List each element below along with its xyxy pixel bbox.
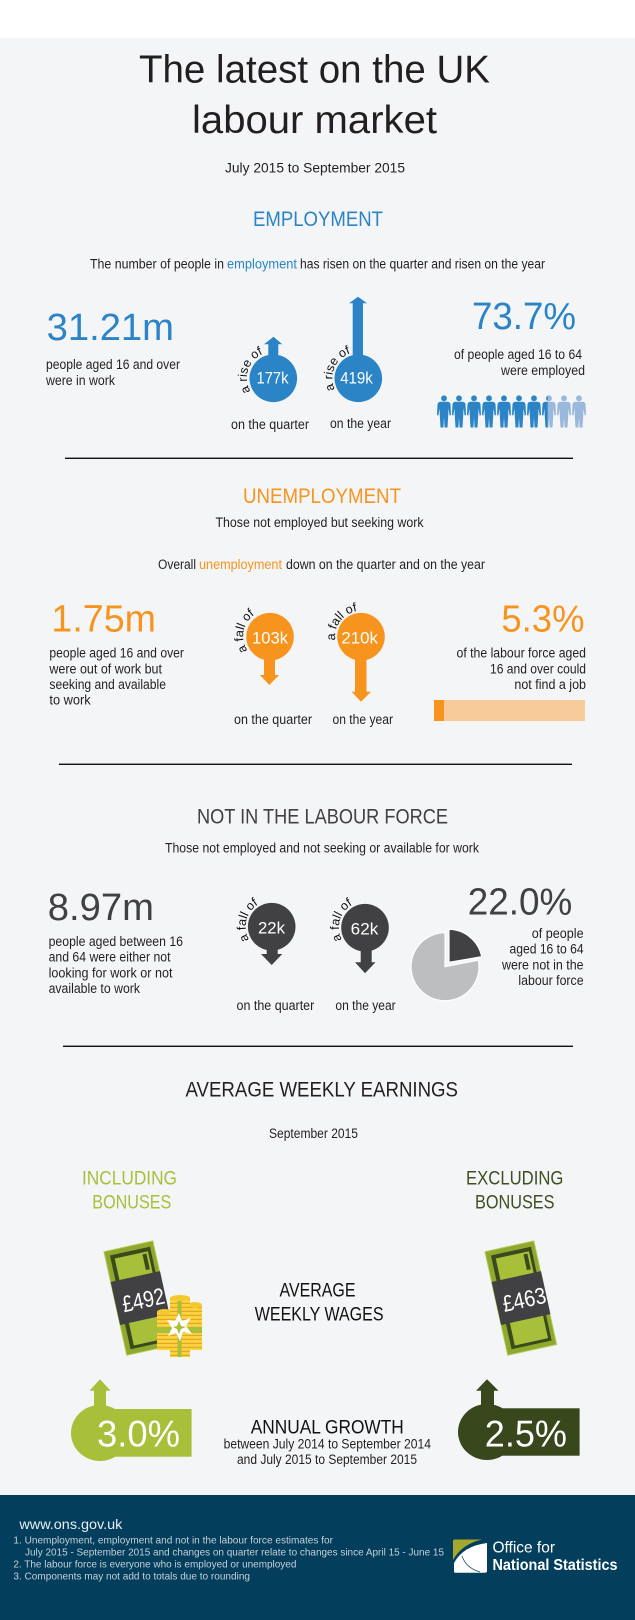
stat: people unemployed: people aged 16 and over bbox=[49, 646, 184, 661]
icon: fall on the quarter: 22k bbox=[258, 918, 285, 938]
icon: fall on the quarter bbox=[234, 608, 312, 727]
stat: people inactive: people aged between 16 bbox=[49, 934, 183, 949]
icon: fall on the year: on the year bbox=[332, 712, 393, 727]
stat: people unemployed: were out of work but bbox=[48, 661, 162, 676]
stat: unemployment rate: 16 and over could bbox=[490, 661, 586, 676]
icon: growth including bonuses: 3.0% bbox=[97, 1414, 180, 1455]
icon: rise on the quarter: on the quarter bbox=[231, 417, 309, 432]
heading: excluding bonuses: BONUSES bbox=[475, 1192, 554, 1213]
website: www.ons.gov.uk bbox=[18, 1516, 123, 1532]
pictogram: people employed bbox=[437, 395, 586, 428]
icon: banknote bundle £463 bbox=[485, 1241, 557, 1355]
title: The latest on the UK bbox=[139, 49, 490, 92]
label: annual growth bbox=[224, 1417, 431, 1467]
heading: including bonuses bbox=[82, 1168, 177, 1213]
stat: inactivity rate: aged 16 to 64 bbox=[510, 942, 584, 957]
stat: unemployment rate: not find a job bbox=[514, 677, 586, 692]
heading: employment: EMPLOYMENT bbox=[253, 208, 383, 231]
stat: people in work: were in work bbox=[45, 373, 115, 388]
title: labour market bbox=[192, 99, 437, 142]
panel: average weekly earnings bbox=[71, 1079, 580, 1467]
stat: employment rate: of people aged 16 to 64 bbox=[454, 347, 582, 362]
stat: inactivity rate: labour force bbox=[518, 973, 584, 988]
footnotes: July 2015 - September 2015 and changes on quarter relate to changes since April 15 - June 15 bbox=[25, 1547, 444, 1558]
panel: not in the labour force bbox=[48, 805, 584, 1013]
icon: banknote bundle £463: £463 bbox=[500, 1282, 548, 1317]
icon: gold coin stacks with bow bbox=[157, 1295, 202, 1357]
stat: people inactive: 8.97m bbox=[48, 887, 154, 929]
footer bbox=[0, 1495, 635, 1620]
label: annual growth: ANNUAL GROWTH bbox=[251, 1417, 404, 1438]
icon: banknote bundle £492 bbox=[104, 1241, 176, 1355]
icon: fall on the quarter: 103k bbox=[252, 628, 288, 647]
icon: fall on the quarter: on the quarter bbox=[236, 998, 315, 1013]
stat: people unemployed bbox=[48, 599, 184, 708]
footnotes bbox=[13, 1535, 444, 1582]
panel: employment bbox=[45, 208, 586, 432]
label: annual growth: between July 2014 to September 2014 bbox=[224, 1437, 431, 1452]
heading: excluding bonuses: EXCLUDING bbox=[466, 1168, 563, 1189]
stat: people in work bbox=[45, 307, 180, 388]
employment summary sentence bbox=[90, 256, 545, 271]
earnings date: September 2015 bbox=[269, 1126, 358, 1141]
icon: fall on the quarter bbox=[236, 896, 315, 1013]
icon: rise on the quarter: a rise of bbox=[238, 346, 262, 393]
logo: Office for National Statistics bbox=[453, 1540, 618, 1574]
logo: Office for National Statistics: National Statistics bbox=[492, 1557, 618, 1574]
stat: employment rate: were employed bbox=[500, 363, 585, 378]
bar: unemployment share bbox=[434, 700, 585, 721]
icon: fall on the year: on the year bbox=[335, 998, 396, 1013]
stat: inactivity rate: 22.0% bbox=[468, 881, 572, 923]
icon: fall on the year: a fall of bbox=[330, 897, 352, 941]
subtitle: date range: July 2015 to September 2015 bbox=[225, 161, 405, 176]
label: average weekly wages: AVERAGE bbox=[280, 1281, 356, 1302]
icon: rise on the quarter: 177k bbox=[256, 368, 289, 387]
employment summary sentence: employment bbox=[227, 256, 297, 271]
icon: rise on the year bbox=[324, 296, 391, 431]
logo: Office for National Statistics: Office for bbox=[492, 1540, 556, 1557]
unemployment summary sentence: unemployment bbox=[199, 557, 282, 572]
stat: people in work: 31.21m bbox=[47, 307, 174, 349]
icon: fall on the year: 62k bbox=[351, 920, 379, 938]
icon: rise on the year: 419k bbox=[340, 368, 373, 387]
icon: rise on the quarter bbox=[231, 336, 309, 432]
footnotes: 3. Components may not add to totals due to rounding bbox=[13, 1571, 250, 1582]
icon: banknote bundle £492: £492 bbox=[119, 1283, 167, 1317]
employment summary sentence: has risen on the quarter and risen on the year bbox=[300, 256, 545, 271]
icon: growth excluding bonuses bbox=[458, 1379, 580, 1460]
stat: unemployment rate: of the labour force aged bbox=[456, 646, 586, 661]
stat: people unemployed: 1.75m bbox=[51, 599, 156, 641]
stat: unemployment rate bbox=[456, 599, 586, 692]
heading: not in the labour force: NOT IN THE LABOUR FORCE bbox=[197, 805, 448, 828]
stat: inactivity rate bbox=[468, 881, 584, 988]
stat: people inactive: available to work bbox=[49, 981, 140, 996]
stat: unemployment rate: 5.3% bbox=[501, 599, 584, 641]
stat: people in work: people aged 16 and over bbox=[46, 357, 180, 372]
pie chart: labour force share bbox=[411, 929, 482, 1001]
stat: inactivity rate: were not in the bbox=[501, 957, 584, 972]
unemployment summary sentence: down on the quarter and on the year bbox=[286, 557, 485, 572]
footnotes: 2. The labour force is everyone who is employed or unemployed bbox=[13, 1559, 296, 1570]
panel: unemployment bbox=[48, 485, 586, 727]
heading: excluding bonuses bbox=[466, 1168, 563, 1213]
title bbox=[139, 49, 490, 142]
stat: people inactive: looking for work or not bbox=[49, 965, 173, 980]
icon: rise on the year: on the year bbox=[330, 416, 391, 431]
label: annual growth: and July 2015 to September 2015 bbox=[237, 1452, 417, 1467]
stat: inactivity rate: of people bbox=[532, 926, 584, 941]
icon: growth including bonuses bbox=[71, 1379, 192, 1461]
icon: fall on the year: 210k bbox=[341, 628, 378, 647]
icon: fall on the year bbox=[328, 602, 393, 727]
footnotes: 1. Unemployment, employment and not in the labour force estimates for bbox=[13, 1535, 334, 1546]
heading: including bonuses: INCLUDING bbox=[82, 1168, 177, 1189]
label: average weekly wages bbox=[255, 1281, 384, 1326]
stat: people inactive: and 64 were either not bbox=[49, 950, 171, 965]
inactivity definition: Those not employed and not seeking or available for work bbox=[165, 841, 479, 856]
icon: fall on the year bbox=[330, 897, 396, 1013]
stat: people inactive bbox=[48, 887, 183, 996]
heading: average weekly earnings: AVERAGE WEEKLY EARNINGS bbox=[186, 1079, 458, 1102]
stat: people unemployed: to work bbox=[49, 693, 91, 708]
icon: fall on the quarter: a fall of bbox=[236, 896, 258, 942]
unemployment definition: Those not employed but seeking work bbox=[216, 515, 424, 530]
heading: unemployment: UNEMPLOYMENT bbox=[243, 485, 401, 508]
icon: growth excluding bonuses: 2.5% bbox=[485, 1414, 567, 1455]
icon: rise on the year: a rise of bbox=[324, 344, 350, 390]
label: average weekly wages: WEEKLY WAGES bbox=[255, 1305, 384, 1326]
employment summary sentence: The number of people in bbox=[90, 256, 224, 271]
icon: fall on the quarter: a fall of bbox=[234, 608, 254, 652]
stat: employment rate: 73.7% bbox=[472, 296, 576, 338]
heading: including bonuses: BONUSES bbox=[92, 1192, 171, 1213]
stat: employment rate bbox=[454, 296, 585, 378]
stat: people unemployed: seeking and available bbox=[49, 677, 166, 692]
unemployment summary sentence: Overall bbox=[158, 557, 196, 572]
unemployment summary sentence bbox=[158, 557, 485, 572]
icon: fall on the quarter: on the quarter bbox=[234, 712, 312, 727]
icon: fall on the year: a fall of bbox=[328, 602, 356, 640]
